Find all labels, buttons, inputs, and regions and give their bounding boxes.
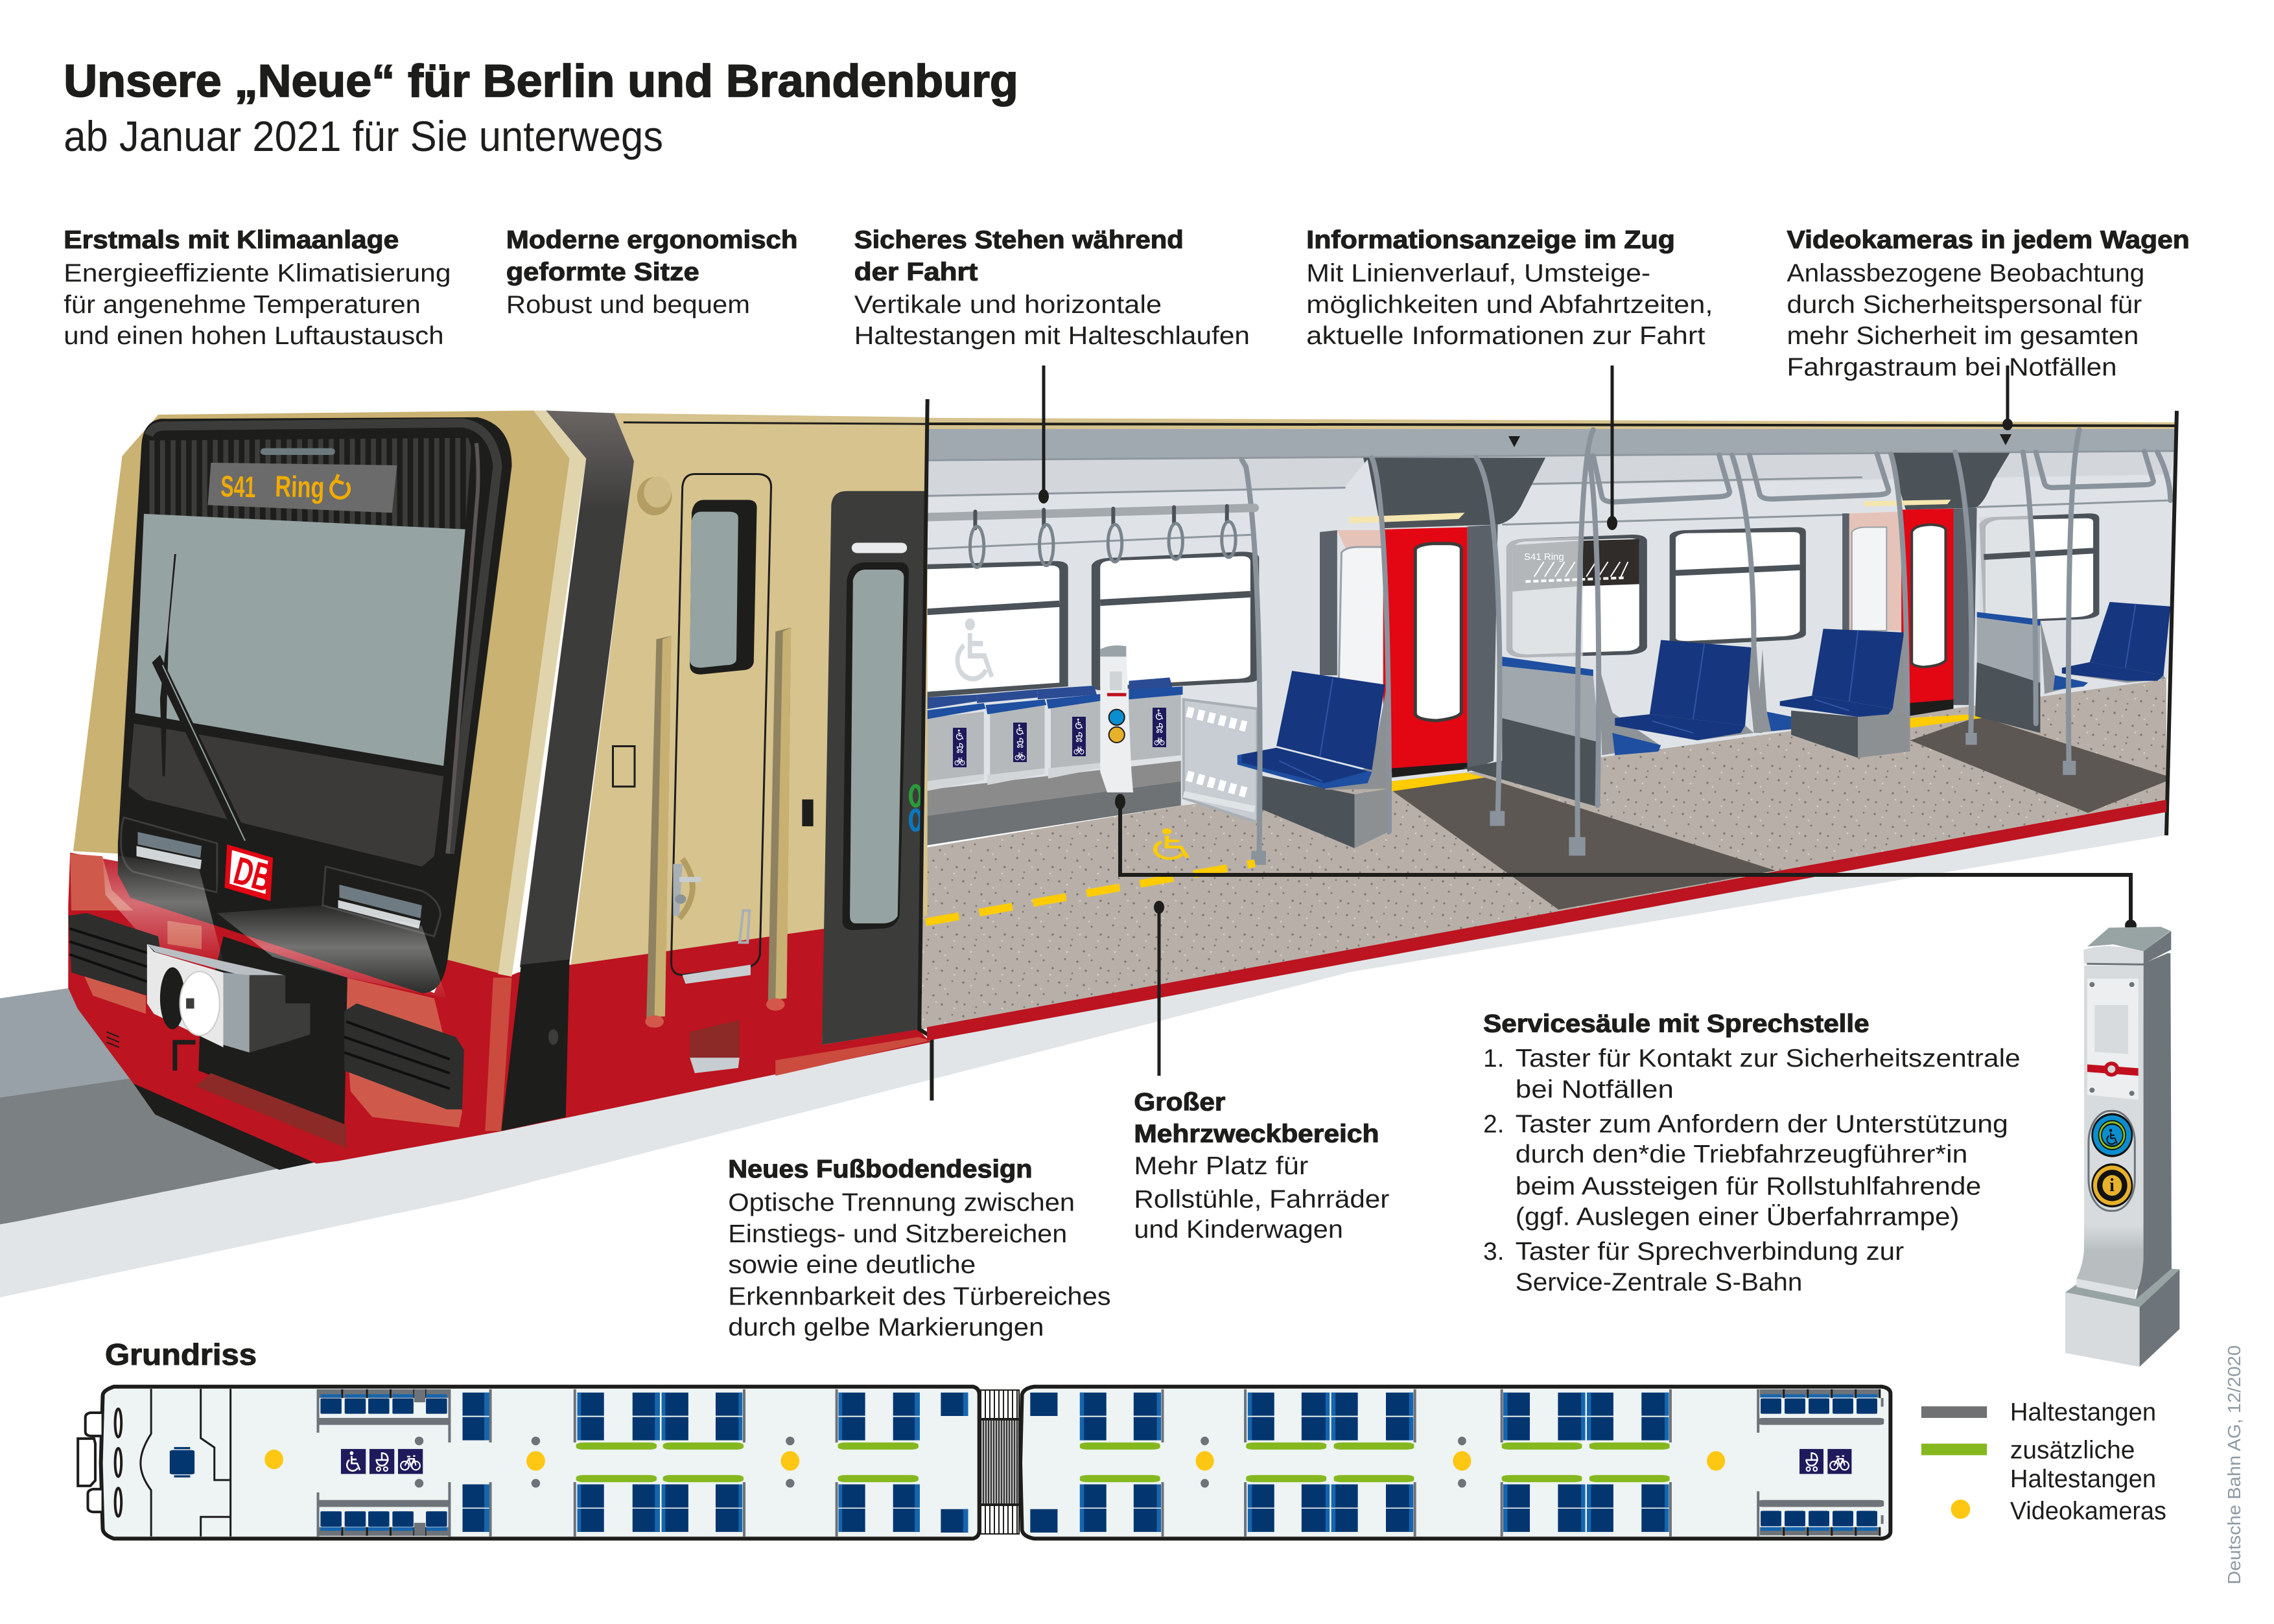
text block: Sitze: Robust und bequem [506, 291, 750, 319]
connector: Videokameras [2002, 365, 2013, 430]
legend: Haltestangen [2010, 1465, 2156, 1493]
text block: Fußbodendesign: sowie eine deutliche [728, 1251, 976, 1279]
text block: Videokameras: Videokameras in jedem Wagen [1787, 226, 2190, 254]
cab door [671, 474, 771, 984]
ceiling [926, 429, 2175, 459]
DB logo text: DB [229, 848, 277, 900]
text block: Informationsanzeige: Informationsanzeige im Zug [1306, 226, 1675, 254]
heading: Grundriss: Grundriss [105, 1338, 257, 1371]
right section line [2166, 411, 2177, 835]
connector: Halteschlaufen [1038, 365, 1049, 504]
grab handle [802, 800, 814, 826]
text block: Sitze [506, 226, 797, 319]
side tan wall [570, 413, 928, 965]
right headlight [323, 866, 440, 936]
hand straps [970, 522, 1236, 568]
platform edge [0, 810, 2166, 1297]
green extra rails [1080, 1443, 1670, 1482]
poles [318, 1389, 837, 1537]
door 2 [1842, 453, 2010, 728]
floor plan: first car [78, 1387, 979, 1538]
dark door floor zones [1392, 716, 2166, 910]
windscreen [135, 514, 465, 766]
text block: Videokameras [1787, 226, 2190, 381]
barrier [1184, 699, 1258, 822]
red sill [927, 800, 2166, 1041]
text block: Sicheres Stehen: der Fahrt [854, 259, 978, 286]
cab partition lines [141, 1389, 231, 1537]
cameras [1196, 1451, 1725, 1470]
text block: Servicesäule: 1. [1483, 1045, 1504, 1073]
poles [1162, 1389, 1882, 1537]
text block: Servicesäule: (ggf. Auslegen einer Überfahrrampe) [1516, 1203, 1959, 1231]
grey poles [415, 1437, 795, 1488]
right grille [344, 1003, 464, 1109]
connector: Servicesäule [1115, 794, 2137, 931]
skirt highlight [775, 1037, 931, 1076]
text block: Servicesäule: 3. [1483, 1238, 1504, 1266]
text block: Servicesäule: beim Aussteigen für Rollstuhlfahrende [1516, 1173, 1981, 1201]
panel: train exterior [68, 399, 932, 1170]
left grille [68, 913, 161, 995]
left headlight [121, 818, 217, 892]
floor plan: second car [1020, 1387, 1890, 1538]
section cut line [919, 399, 932, 1100]
panel: service column [2065, 927, 2179, 1367]
text block: Mehrzweckbereich: Großer [1134, 1089, 1225, 1117]
text block: Servicesäule: durch den*die Triebfahrzeugführer*in [1516, 1141, 1967, 1168]
text block: Informationsanzeige: Mit Linienverlauf, Umsteige- [1306, 260, 1650, 288]
window 4 [1670, 528, 1806, 645]
legend [1921, 1398, 2166, 1525]
text block: Informationsanzeige [1306, 226, 1713, 350]
panel: train interior [920, 418, 2175, 910]
text block: Servicesäule [1483, 1010, 2021, 1297]
folding seats top [1758, 1389, 1884, 1425]
floor plan pictograms [347, 1451, 1849, 1471]
under-coupler cavity [198, 936, 347, 1128]
folding seats bottom [318, 1500, 449, 1536]
text block: Klimaanlage: Energieeffiziente Klimatisierung [64, 260, 451, 288]
cameras [264, 1450, 799, 1470]
destination text: S41 [220, 469, 256, 504]
passenger door [822, 491, 928, 1045]
green extra rails [576, 1443, 919, 1482]
text block: Videokameras: mehr Sicherheit im gesamten [1787, 322, 2139, 350]
icon: wheelchair floor marking [1155, 828, 1188, 859]
subtitle: ab Januar 2021 für Sie unterwegs [64, 113, 663, 160]
icon: wheelchair button [2107, 1129, 2117, 1144]
handrails [645, 627, 791, 1028]
seats [463, 1393, 968, 1533]
text block: Servicesäule: Servicesäule mit Sprechstelle [1483, 1010, 1870, 1038]
cream stripe [498, 410, 586, 977]
partition 1 [1463, 656, 1661, 807]
text block: Klimaanlage: und einen hohen Luftaustausch [64, 322, 444, 350]
folding seats top [318, 1389, 449, 1425]
ribbed header [144, 438, 471, 529]
text block: Mehrzweckbereich: Mehr Platz für [1134, 1152, 1308, 1180]
icon: ceiling camera left [1508, 436, 1520, 447]
text block: Sicheres Stehen: Vertikale und horizontale [854, 291, 1162, 319]
pole feet [1251, 733, 2076, 865]
text block: Fußbodendesign: Einstiegs- und Sitzbereichen [728, 1220, 1067, 1248]
connector: Informationsanzeige [1607, 365, 1617, 530]
seat pair rear [1780, 629, 1910, 758]
pictogram backgrounds [1799, 1449, 1851, 1474]
tiny display label: S41 Ring [1524, 551, 1564, 563]
text block: Informationsanzeige: aktuelle Informationen zur Fahrt [1306, 322, 1706, 350]
service column in the train [1100, 645, 1133, 793]
seat row front [1237, 671, 1389, 848]
text block: Informationsanzeige: möglichkeiten und Abfahrtzeiten, [1306, 291, 1713, 319]
text block: Klimaanlage: Erstmals mit Klimaanlage [64, 226, 399, 254]
text block: Videokameras: Anlassbezogene Beobachtung [1787, 260, 2144, 288]
door buttons [911, 786, 920, 830]
icon: wheelchair wall pictogram [957, 618, 992, 679]
seat pair far end [2062, 602, 2170, 682]
window 1 [925, 561, 1068, 697]
text block: Servicesäule: Service-Zentrale S-Bahn [1516, 1269, 1802, 1297]
wiper [152, 554, 252, 843]
text block: Mehrzweckbereich: Mehrzweckbereich [1134, 1120, 1379, 1148]
floor of the passenger compartment [917, 679, 2166, 1030]
text block: Fußbodendesign [728, 1155, 1111, 1341]
icon: ring arrow [331, 474, 349, 498]
text block: Fußbodendesign: Optische Trennung zwischen [728, 1189, 1075, 1216]
text block: Fußbodendesign: durch gelbe Markierungen [728, 1314, 1044, 1341]
seats [1030, 1393, 1669, 1533]
floor plan: gangway [981, 1390, 1019, 1534]
text block: Sicheres Stehen [854, 226, 1250, 350]
pictogram backgrounds [341, 1449, 423, 1474]
text block: Servicesäule: 2. [1483, 1110, 1504, 1138]
wheelchair wall panel: back row seats [920, 677, 1182, 846]
seat pair middle [1615, 640, 1813, 740]
DB logo base [217, 835, 285, 908]
car outline [1020, 1387, 1890, 1538]
partition 2 [1975, 612, 2088, 733]
coupler [147, 944, 311, 1071]
text block: Mehrzweckbereich: Rollstühle, Fahrräder [1134, 1186, 1389, 1214]
icon: info button: i [2109, 1176, 2115, 1196]
side wall [920, 450, 2175, 846]
text block: Sicheres Stehen: Haltestangen mit Halteschlaufen [854, 322, 1250, 350]
legend: zusätzliche [2010, 1436, 2135, 1464]
destination display [208, 463, 397, 513]
legend: Videokameras [2010, 1498, 2166, 1525]
small hatch [613, 747, 635, 787]
right headlight glow [217, 905, 447, 998]
bottom dark skirt [134, 1076, 316, 1170]
text block: Klimaanlage [64, 226, 451, 350]
folding seats bottom [1758, 1500, 1884, 1536]
vent lines [107, 1032, 119, 1047]
text block: Sitze: Moderne ergonomisch [506, 226, 797, 254]
window 5 [1980, 513, 2099, 623]
text block: Servicesäule: Taster für Kontakt zur Sicherheitszentrale [1516, 1045, 2021, 1073]
seat pictograms [953, 708, 1166, 767]
foot step [690, 1020, 740, 1073]
text block: Sitze: geformte Sitze [506, 259, 699, 286]
connector: Mehrzweckbereich [1154, 901, 1164, 1076]
window 2 [1092, 551, 1259, 690]
roof line [927, 424, 2177, 426]
text block: Servicesäule: Taster zum Anfordern der Unterstützung [1516, 1110, 2008, 1138]
text block: Videokameras: Fahrgastraum bei Notfällen [1787, 353, 2117, 381]
text block: Servicesäule: Taster für Sprechverbindung zur [1516, 1238, 1904, 1266]
yellow floor line [926, 863, 1255, 922]
text block: Videokameras: durch Sicherheitspersonal für [1787, 291, 2142, 319]
grab poles and handrails [926, 430, 2170, 861]
lower dark panel [128, 723, 443, 866]
grey poles [1201, 1437, 1466, 1488]
icon: ceiling camera right [2000, 434, 2011, 445]
car outline [101, 1387, 979, 1538]
legend: Haltestangen [2010, 1398, 2156, 1426]
text: Ring [275, 469, 325, 504]
red highlights [70, 853, 462, 1128]
text block: Fußbodendesign: Erkennbarkeit des Türbereiches [728, 1282, 1111, 1310]
text block: Sicheres Stehen: Sicheres Stehen während [854, 226, 1184, 254]
credit: Deutsche Bahn AG, 12/2020 [2224, 1345, 2244, 1584]
front tan body [73, 410, 586, 975]
roof edge [926, 418, 2175, 429]
window frame [118, 417, 512, 993]
horn housing [637, 476, 672, 515]
text block: Klimaanlage: für angenehme Temperaturen [64, 291, 421, 319]
door 1 [1320, 458, 1545, 791]
text block: Mehrzweckbereich: und Kinderwagen [1134, 1216, 1343, 1244]
text block: Fußbodendesign: Neues Fußbodendesign [728, 1155, 1033, 1183]
information display window [1506, 535, 1647, 657]
text block: Mehrzweckbereich [1134, 1089, 1389, 1244]
title: Unsere „Neue“ für Berlin und Brandenburg [64, 55, 1018, 106]
ground next to train [0, 988, 298, 1225]
text block: Servicesäule: bei Notfällen [1516, 1076, 1674, 1104]
cab outline details [78, 1409, 121, 1516]
left headlight glow [102, 853, 224, 962]
black corner pillar [520, 410, 634, 968]
red lower body [68, 853, 931, 1164]
driver seat [170, 1447, 194, 1478]
